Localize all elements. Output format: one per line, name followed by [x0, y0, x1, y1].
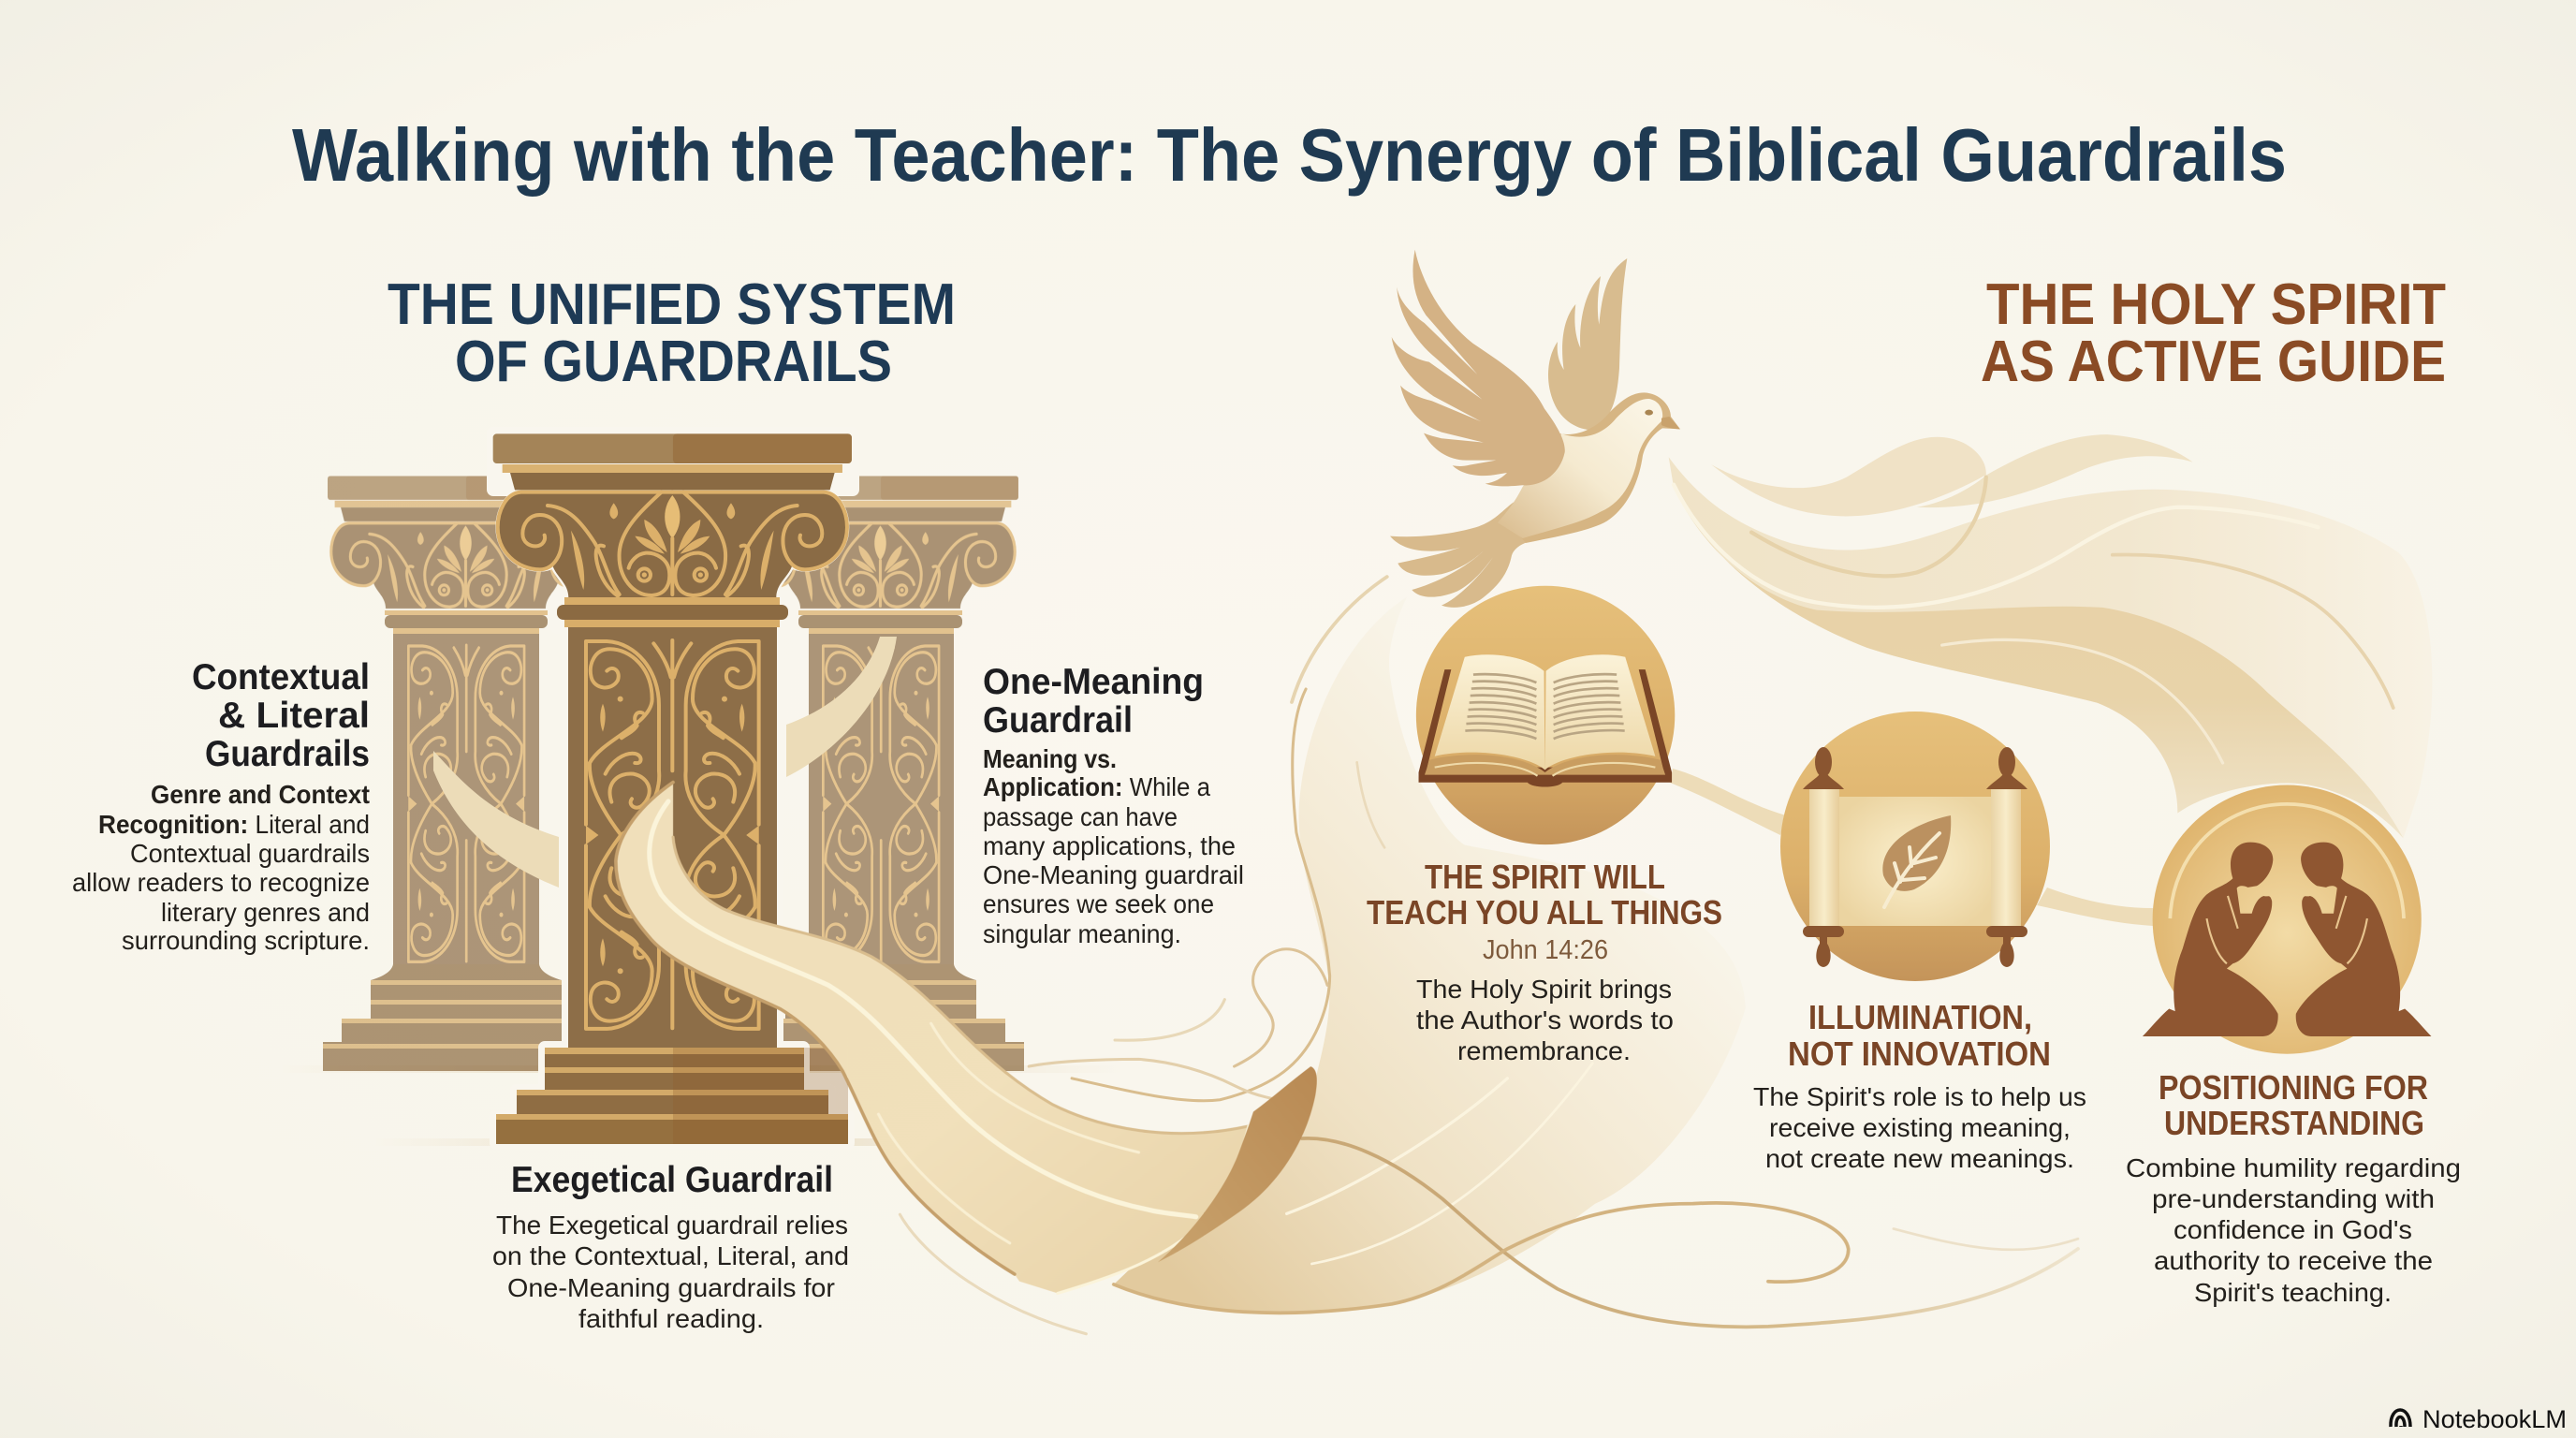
label: one-meaning guardrail: One-Meaning guardrail — [983, 860, 1244, 889]
text: positioning for understanding: pre-understanding with — [2152, 1184, 2435, 1213]
panel: unified system of guardrails — [72, 272, 1244, 1333]
text: the spirit will teach you all things — [1367, 858, 1722, 1065]
label: exegetical guardrail: Exegetical Guardrail — [511, 1160, 833, 1200]
text: positioning for understanding — [2126, 1068, 2461, 1307]
label: exegetical guardrail — [492, 1160, 849, 1333]
floor shadow — [281, 1065, 1123, 1146]
icon: scroll with leaf in circle — [1780, 712, 2050, 981]
icon: two kneeling figures praying in circle — [2143, 785, 2431, 1054]
label: exegetical guardrail: on the Contextual, Literal, and — [492, 1241, 849, 1270]
label: contextual and literal guardrails: Contextual guardrails — [130, 839, 370, 868]
label: one-meaning guardrail: ensures we seek one — [983, 889, 1214, 918]
heading: holy spirit: THE HOLY SPIRIT — [1986, 272, 2446, 337]
icon: dove — [1390, 250, 1680, 608]
text: illumination, not innovation: ILLUMINATION, — [1808, 998, 2032, 1036]
label: contextual and literal guardrails: Recognition: Literal and — [98, 810, 370, 839]
wind swoosh from dove to prayer circle — [1669, 434, 2432, 838]
label: exegetical guardrail: One-Meaning guardrails for — [507, 1273, 835, 1302]
text: the spirit will teach you all things: THE SPIRIT WILL — [1425, 858, 1665, 896]
ribbon edges — [616, 782, 1249, 1293]
title: Walking with the Teacher: The Synergy of Biblical Guardrails — [292, 113, 2287, 197]
label: contextual and literal guardrails: literary genres and — [161, 898, 370, 927]
text: positioning for understanding: POSITIONING FOR — [2159, 1068, 2428, 1107]
text: illumination, not innovation — [1753, 998, 2086, 1173]
strands crossing lower right — [1114, 1138, 2078, 1327]
heading: unified system — [388, 272, 956, 394]
text: positioning for understanding: Spirit's teaching. — [2194, 1278, 2392, 1307]
connector: scroll to prayer circle — [2037, 888, 2153, 926]
text: positioning for understanding: UNDERSTANDING — [2164, 1104, 2424, 1142]
heading: holy spirit: AS ACTIVE GUIDE — [1981, 330, 2446, 394]
pillar: central exegetical — [493, 433, 853, 1144]
pillar: right one-meaning — [738, 476, 1024, 1071]
panel: holy spirit as active guide — [1367, 250, 2461, 1307]
text: the spirit will teach you all things: John 14:26 — [1483, 935, 1608, 965]
text: positioning for understanding: authority to receive the — [2154, 1246, 2433, 1275]
thin flowing strands near ribbon — [900, 689, 1330, 1334]
ribbon behind right pillar — [786, 637, 897, 777]
heading: unified system: OF GUARDRAILS — [455, 330, 892, 394]
label: exegetical guardrail: faithful reading. — [578, 1304, 764, 1333]
label: contextual and literal guardrails: & Literal — [218, 696, 370, 736]
text: the spirit will teach you all things: the Author's words to — [1416, 1005, 1674, 1034]
icon: open book in circle — [1416, 586, 1675, 844]
label: one-meaning guardrail: One-Meaning — [983, 662, 1204, 702]
text: positioning for understanding: confidence in God's — [2174, 1215, 2412, 1244]
label: one-meaning guardrail: many applications, the — [983, 831, 1236, 860]
pillar: left contextual and literal — [323, 476, 609, 1071]
text: the spirit will teach you all things: TEACH YOU ALL THINGS — [1367, 893, 1722, 932]
text: the spirit will teach you all things: The Holy Spirit brings — [1416, 975, 1672, 1004]
label: one-meaning guardrail: passage can have — [983, 802, 1178, 831]
label: contextual and literal guardrails — [72, 657, 370, 955]
label: exegetical guardrail: The Exegetical guardrail relies — [496, 1211, 848, 1240]
label: one-meaning guardrail: Meaning vs. — [983, 744, 1117, 773]
text: illumination, not innovation: receive existing meaning, — [1769, 1113, 2071, 1142]
flowing sheet behind spirit text — [1114, 577, 1746, 1313]
watermark: NotebookLM: NotebookLM — [2422, 1405, 2567, 1433]
label: one-meaning guardrail: Application: While a — [983, 772, 1210, 801]
heading: unified system: THE UNIFIED SYSTEM — [388, 272, 956, 337]
label: one-meaning guardrail: singular meaning. — [983, 919, 1181, 948]
heading: holy spirit — [1981, 272, 2446, 394]
text: the spirit will teach you all things: remembrance. — [1457, 1036, 1631, 1065]
main ribbon through pillars — [616, 782, 1317, 1293]
label: contextual and literal guardrails: surrounding scripture. — [122, 926, 370, 955]
label: contextual and literal guardrails: allow readers to recognize — [72, 868, 370, 897]
ribbon fold — [1158, 1066, 1317, 1262]
label: one-meaning guardrail — [983, 662, 1244, 948]
label: one-meaning guardrail: Guardrail — [983, 700, 1133, 741]
text: illumination, not innovation: NOT INNOVATION — [1788, 1034, 2051, 1073]
label: contextual and literal guardrails: Contextual — [192, 657, 370, 697]
label: contextual and literal guardrails: Genre and Context — [151, 780, 370, 809]
ribbon behind left pillar — [433, 751, 559, 888]
text: positioning for understanding: Combine humility regarding — [2126, 1153, 2461, 1182]
text: illumination, not innovation: The Spirit's role is to help us — [1753, 1082, 2086, 1111]
connector: book to scroll — [1670, 769, 1786, 835]
text: illumination, not innovation: not create new meanings. — [1765, 1144, 2074, 1173]
label: contextual and literal guardrails: Guardrails — [205, 734, 370, 774]
